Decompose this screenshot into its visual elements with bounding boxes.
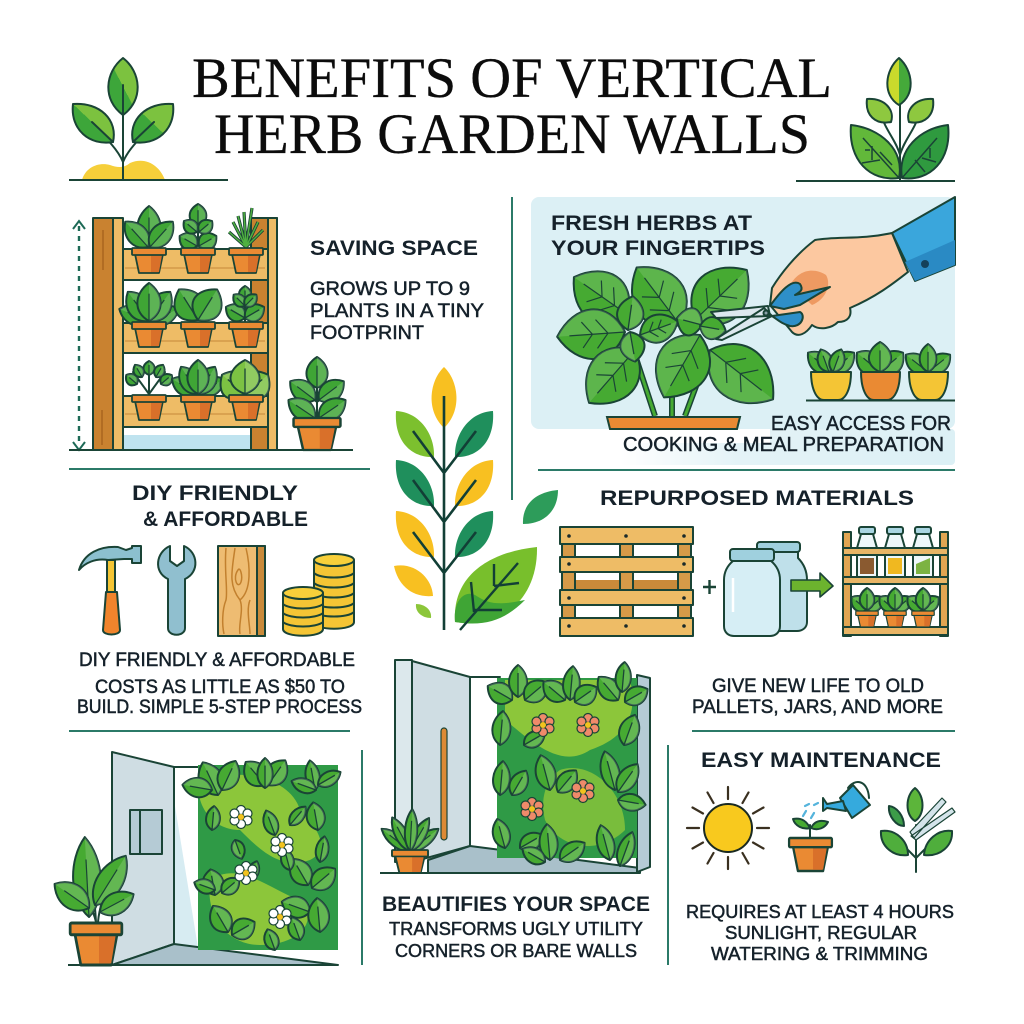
living wall <box>68 754 344 965</box>
easy access text <box>623 413 951 456</box>
repurposed text <box>692 676 943 718</box>
herbs row 3 <box>123 360 277 420</box>
door and floor <box>395 660 650 873</box>
icon: coins <box>283 554 354 636</box>
panel: repurposed materials <box>560 487 948 718</box>
maintenance text <box>686 902 954 964</box>
beautifies text: TRANSFORMS UGLY UTILITY <box>389 919 643 939</box>
saving space text: FOOTPRINT <box>310 323 424 344</box>
saving space text: GROWS UP TO 9 <box>310 279 470 300</box>
panel: diy friendly <box>77 482 362 718</box>
small pots on shelf <box>802 342 956 400</box>
diy heading: & AFFORDABLE <box>143 508 308 531</box>
diy text <box>77 650 362 718</box>
herbs row 1 <box>118 204 263 273</box>
panel background <box>531 197 955 465</box>
saving space text <box>310 237 484 344</box>
icon: pallet <box>560 527 693 636</box>
door and floor <box>112 752 338 965</box>
icon: wood plank <box>218 546 265 636</box>
icon: sprout top right <box>796 58 955 181</box>
icon: wrench <box>158 546 195 635</box>
saving space text: SAVING SPACE <box>310 237 478 260</box>
repurposed text: PALLETS, JARS, AND MORE <box>692 697 943 718</box>
icon: jars <box>724 542 807 636</box>
panel: green wall left <box>48 752 344 965</box>
easy access text: EASY ACCESS FOR <box>771 413 951 435</box>
potted plant <box>48 836 139 965</box>
panel: easy maintenance <box>686 749 955 964</box>
small potted plant <box>69 357 353 450</box>
panel: beautifies your space <box>378 660 652 961</box>
repurposed text: GIVE NEW LIFE TO OLD <box>712 676 924 697</box>
basil plant <box>555 251 790 429</box>
beautifies text: BEAUTIFIES YOUR SPACE <box>382 893 650 916</box>
icon: sun <box>687 787 769 869</box>
diy text: BUILD. SIMPLE 5-STEP PROCESS <box>77 697 362 718</box>
title: HERB GARDEN WALLS <box>214 103 810 166</box>
icon: watering can and seedling <box>789 782 870 871</box>
potted plant <box>378 809 640 873</box>
herbs row 2 <box>116 282 268 347</box>
icon: hammer <box>79 546 141 634</box>
fresh herbs heading: YOUR FINGERTIPS <box>551 237 765 260</box>
fresh herbs heading: FRESH HERBS AT <box>551 212 752 235</box>
fresh herbs heading <box>551 212 765 260</box>
big leaf <box>455 547 537 623</box>
icon: trimmed herb <box>881 788 955 872</box>
center plant <box>394 367 558 630</box>
plus <box>703 580 716 594</box>
diy text: COSTS AS LITTLE AS $50 TO <box>95 677 345 698</box>
shelf unit <box>73 218 277 450</box>
easy access text: COOKING & MEAL PREPARATION <box>623 434 944 456</box>
living wall <box>483 661 652 869</box>
maintenance text: REQUIRES AT LEAST 4 HOURS <box>686 902 954 922</box>
diy heading <box>132 482 308 531</box>
diy heading: DIY FRIENDLY <box>132 482 298 505</box>
maintenance text: WATERING & TRIMMING <box>711 944 928 964</box>
arrow <box>791 573 833 597</box>
panel: saving space <box>69 204 484 450</box>
icon: shelf with jars <box>843 527 948 636</box>
repurposed heading: REPURPOSED MATERIALS <box>600 487 914 510</box>
title <box>192 47 832 166</box>
beautifies text <box>382 893 650 961</box>
title: BENEFITS OF VERTICAL <box>192 47 832 110</box>
panel: fresh herbs <box>531 197 956 465</box>
maintenance heading: EASY MAINTENANCE <box>701 749 941 772</box>
diy text: DIY FRIENDLY & AFFORDABLE <box>79 650 355 671</box>
icon: sprout top left <box>69 58 228 180</box>
maintenance text: SUNLIGHT, REGULAR <box>725 923 917 943</box>
beautifies text: CORNERS OR BARE WALLS <box>395 941 637 961</box>
hand with scissors <box>711 197 955 340</box>
saving space text: PLANTS IN A TINY <box>310 301 484 322</box>
